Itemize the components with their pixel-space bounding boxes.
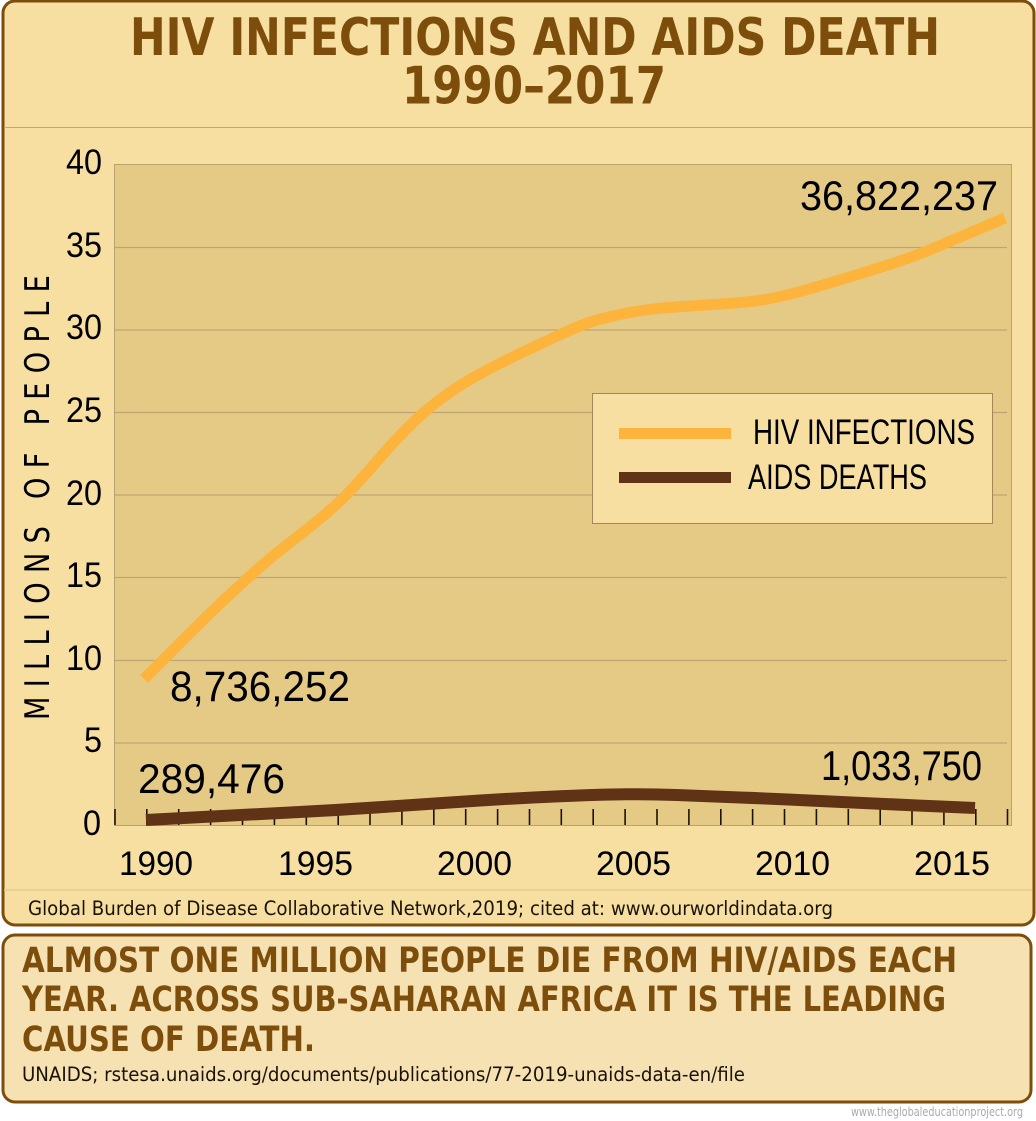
key message text — [21, 941, 957, 1060]
data label: 289,476: 289,476 — [138, 755, 285, 802]
key message text: CAUSE OF DEATH. — [22, 1020, 315, 1060]
data label: 8,736,252: 8,736,252 — [170, 663, 350, 711]
y-axis labels: 10 — [66, 639, 102, 678]
y-axis labels: 15 — [66, 556, 102, 595]
x-axis labels: 1995 — [278, 845, 353, 883]
x-axis labels — [119, 845, 990, 883]
line: AIDS deaths — [146, 794, 975, 820]
title: 1990–2017 — [402, 56, 666, 116]
chart: line chart — [18, 143, 1012, 883]
y-axis labels: 40 — [66, 143, 102, 182]
legend: AIDS DEATHS — [748, 458, 927, 497]
data label: 1,033,750: 1,033,750 — [821, 742, 982, 789]
x-axis labels: 1990 — [119, 845, 193, 883]
line: HIV infections — [144, 218, 1005, 679]
message source: UNAIDS; rstesa.unaids.org/documents/publications/77-2019-unaids-data-en/file — [22, 1063, 745, 1086]
title — [130, 8, 940, 116]
x-axis labels: 2010 — [755, 845, 830, 883]
panel: key message — [3, 935, 1031, 1102]
y-axis labels: 35 — [66, 226, 102, 265]
legend: HIV INFECTIONS — [753, 413, 975, 452]
y-axis labels: 0 — [83, 804, 101, 843]
legend — [592, 394, 992, 524]
x-axis labels: 2000 — [437, 845, 512, 883]
y-axis labels — [66, 143, 102, 843]
y-axis title: MILLIONS OF PEOPLE — [18, 275, 58, 720]
plot area — [114, 164, 1012, 826]
y-axis labels: 20 — [66, 474, 102, 513]
x-axis labels: 2005 — [596, 845, 671, 883]
y-axis labels: 25 — [66, 391, 102, 430]
x-axis labels: 2015 — [914, 845, 990, 883]
chart source: Global Burden of Disease Collaborative Network,2019; cited at: www.ourworldindata.org — [28, 897, 833, 920]
y-axis labels: 30 — [66, 308, 102, 347]
data label: 36,822,237: 36,822,237 — [800, 172, 998, 219]
y-axis labels: 5 — [84, 721, 102, 760]
